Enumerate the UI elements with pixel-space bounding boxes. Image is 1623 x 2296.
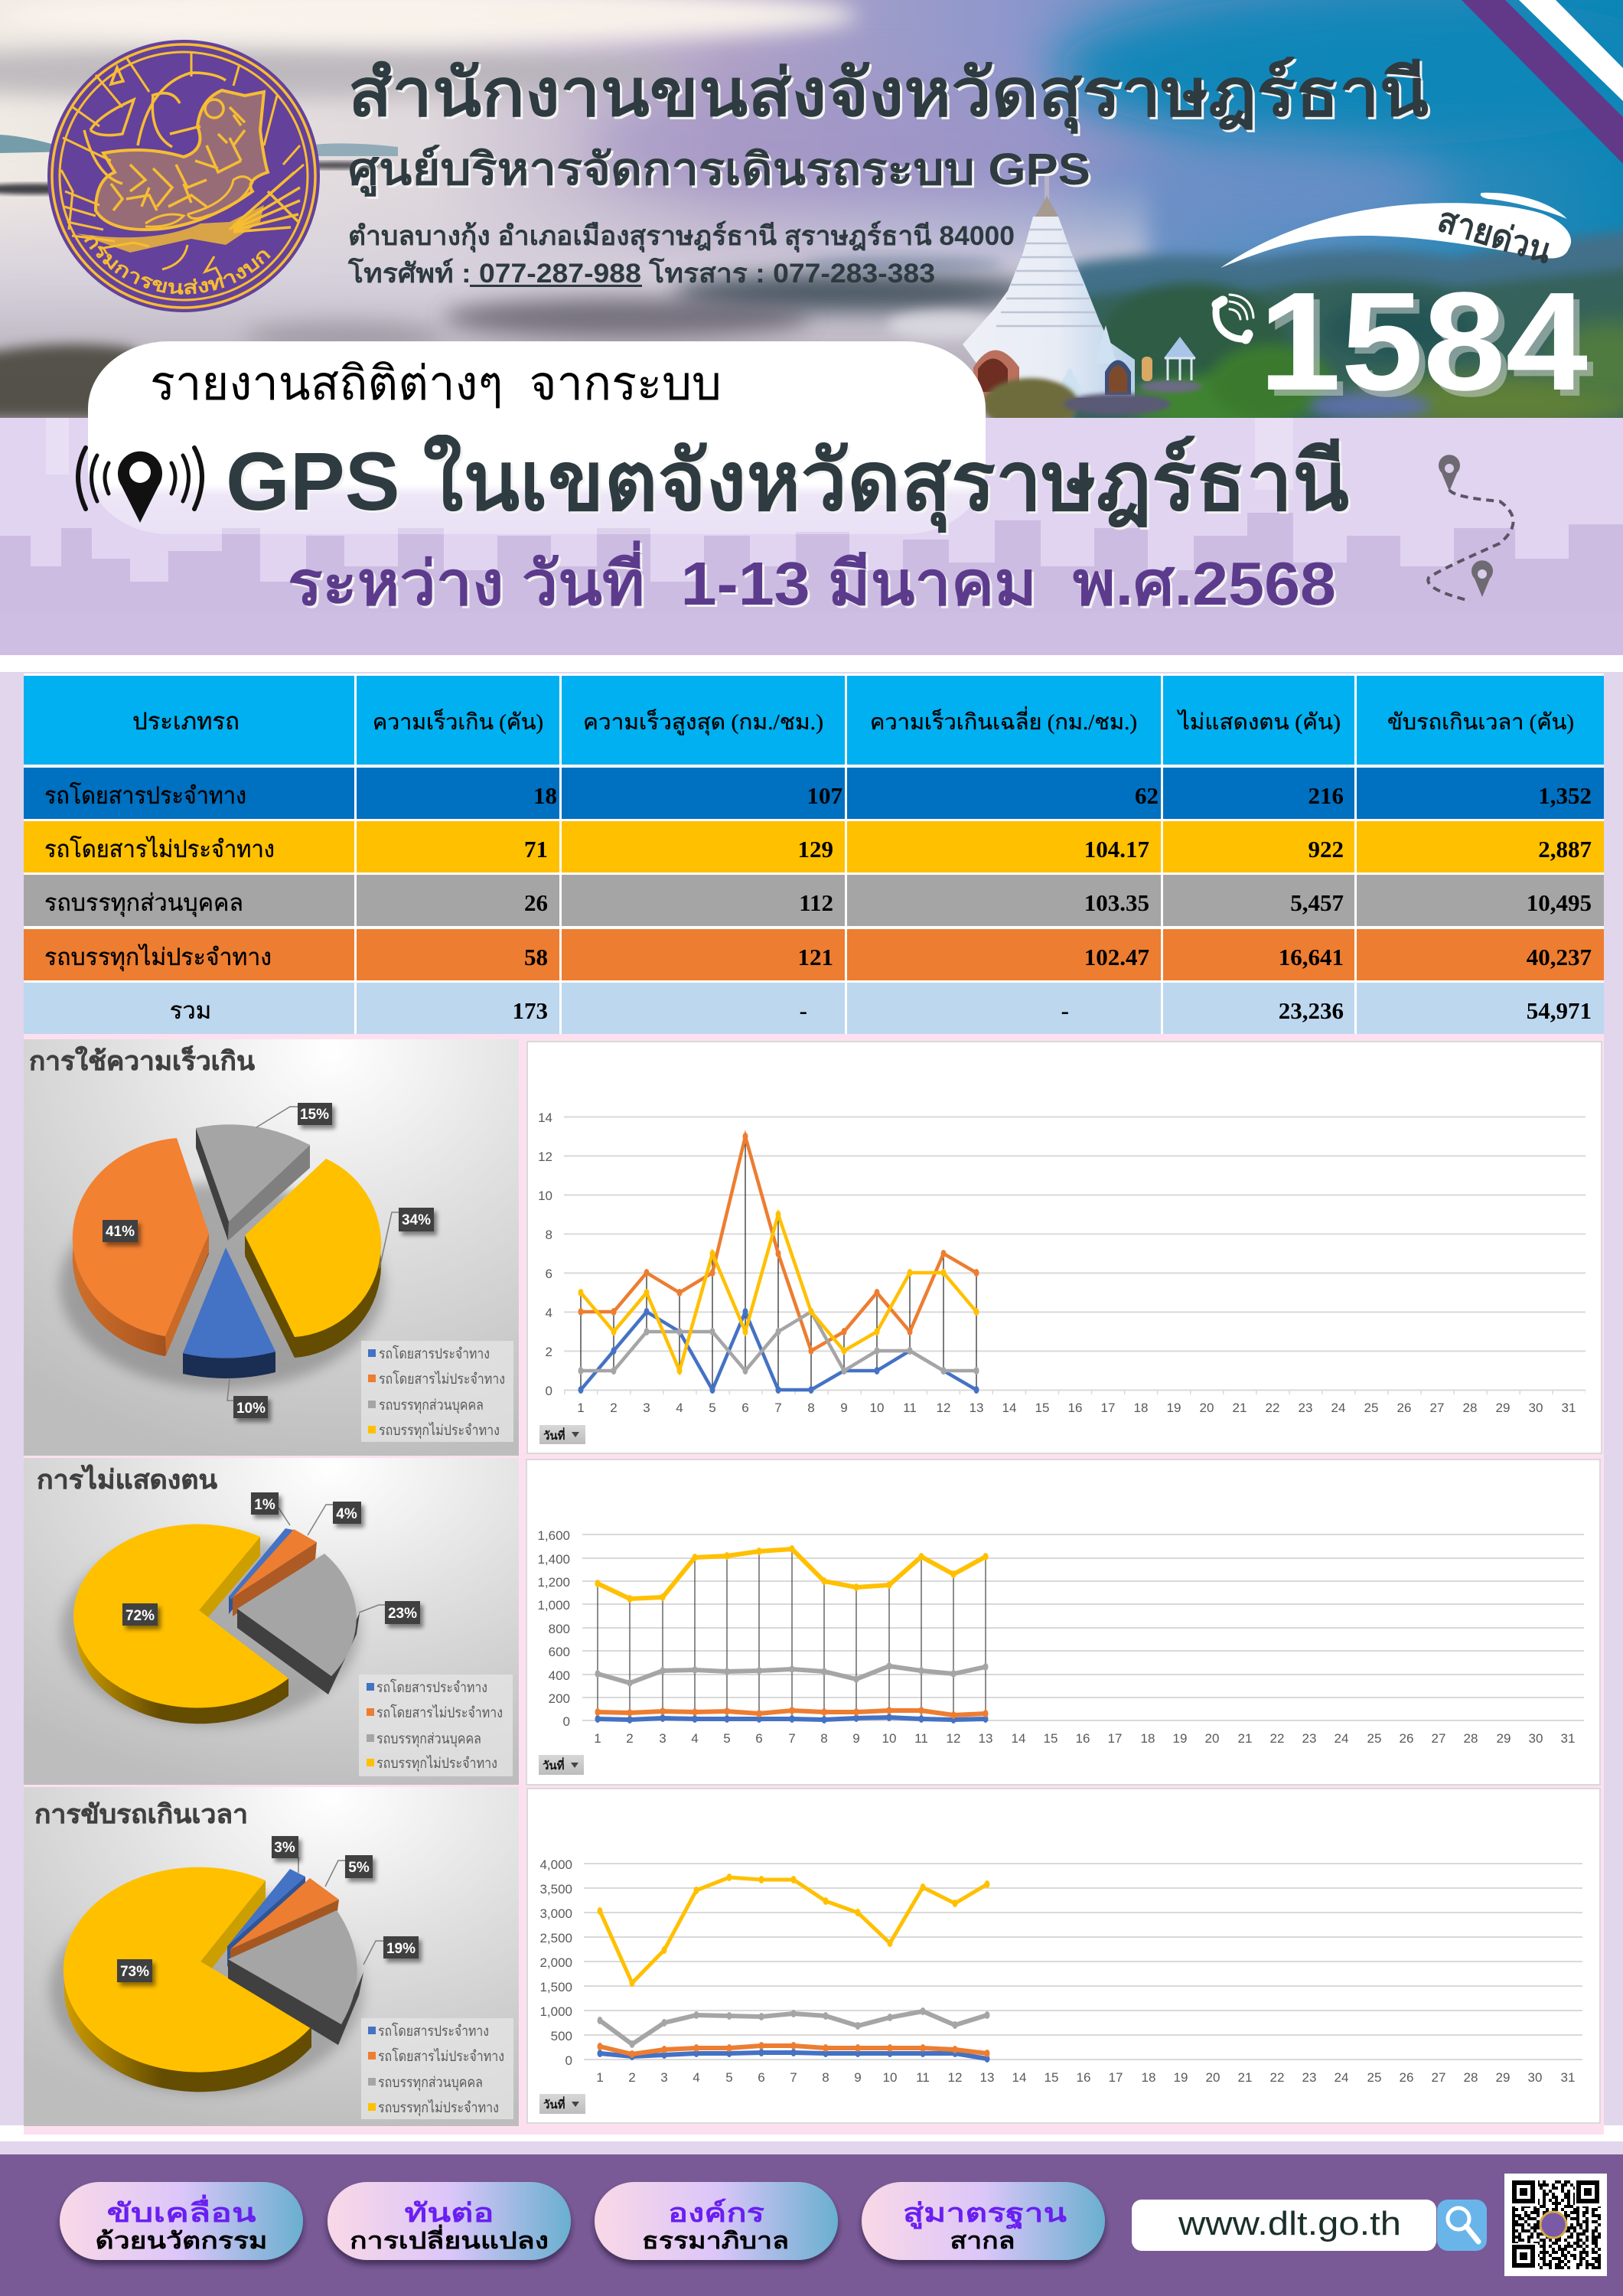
x axis labels: 1 [594, 1731, 601, 1746]
series: private truck [600, 2011, 987, 2044]
x axis labels: 21 [1233, 1401, 1247, 1415]
row: non-fixed-route truck: 58 [524, 944, 548, 970]
address: ตำบลบางกุ้ง อำเภอเมืองสุราษฎร์ธานี สุราษฎร์ธานี 84000 [348, 220, 1015, 253]
pie slice: fixed bus 3% [227, 1869, 305, 1967]
x axis labels: 22 [1270, 1731, 1284, 1746]
pie slice: non-fixed bus 4% [233, 1529, 317, 1616]
row: fixed-route bus: 1,352 [1538, 782, 1592, 809]
x axis labels [594, 1731, 1575, 1746]
x axis labels: 27 [1432, 1731, 1445, 1746]
legend: รถโดยสารประจำทาง [376, 1678, 487, 1696]
x axis labels: 19 [1173, 1731, 1187, 1746]
x axis labels: 26 [1400, 2070, 1413, 2085]
row: non-fixed-route truck: 121 [797, 944, 833, 970]
x axis labels: 17 [1101, 1401, 1115, 1415]
label 23%: 23% [388, 1606, 417, 1622]
x axis labels: 27 [1432, 2070, 1445, 2085]
series: non-fixed truck [598, 1549, 986, 1599]
header photo: misty mountains and white stupa [0, 0, 1623, 436]
row: fixed-route bus: 18 [533, 782, 557, 809]
x axis labels: 2 [610, 1401, 618, 1415]
row: non-fixed-route bus: รถโดยสารไม่ประจำทาง [44, 836, 275, 863]
filter button: day [539, 1425, 585, 1444]
x axis labels: 28 [1464, 2070, 1478, 2085]
x axis labels: 18 [1141, 1731, 1155, 1746]
x axis labels: 13 [979, 1731, 992, 1746]
legend: รถบรรทุกส่วนบุคคล [376, 1731, 481, 1748]
x axis labels: 11 [916, 2070, 930, 2085]
row: private truck [24, 875, 1604, 926]
panel: speeding line chart [527, 1042, 1602, 1453]
x axis labels: 27 [1430, 1401, 1444, 1415]
statistics table [24, 673, 1604, 1034]
label 15%: 15% [300, 1107, 329, 1123]
hotline swoosh [1221, 193, 1571, 271]
high-low lines [581, 1137, 976, 1390]
legend: รถโดยสารประจำทาง [378, 2022, 489, 2040]
pie slice: truck non-fixed 34% [245, 1159, 381, 1358]
hotline swoosh: สายด่วน [1433, 199, 1556, 271]
row: total: - [1061, 997, 1069, 1024]
row: private truck: 5,457 [1290, 889, 1344, 916]
pie slice: non-fixed bus 5% [230, 1878, 339, 1959]
filter button: day: วันที่ [543, 1757, 565, 1773]
label 19% [383, 1936, 419, 1958]
legend: รถโดยสารไม่ประจำทาง [379, 1370, 505, 1388]
y axis labels [539, 1857, 572, 2068]
row: non-fixed-route bus: 129 [797, 836, 833, 863]
row: private truck: 112 [799, 889, 833, 916]
row: fixed-route bus [24, 768, 1604, 819]
y axis labels: 14 [538, 1110, 552, 1125]
series: fixed bus [581, 1312, 976, 1390]
row: non-fixed-route bus [24, 821, 1604, 872]
y axis labels: 1,200 [537, 1575, 570, 1590]
centre subtitle: ศูนย์บริหารจัดการเดินรถระบบ GPS [348, 144, 1090, 197]
x axis labels: 3 [659, 1731, 666, 1746]
row: total: - [800, 997, 807, 1024]
x axis labels: 2 [626, 1731, 634, 1746]
x axis labels: 5 [725, 2070, 733, 2085]
x axis labels: 12 [947, 1731, 960, 1746]
x axis labels: 20 [1200, 1401, 1214, 1415]
legend: รถบรรทุกไม่ประจำทาง [378, 2099, 499, 2117]
x axis labels: 11 [914, 1731, 928, 1746]
lavender band with city skyline [0, 418, 1623, 655]
white pill behind report title [88, 341, 986, 534]
legend [361, 1341, 513, 1442]
x axis labels: 7 [774, 1401, 782, 1415]
y axis labels: 200 [549, 1691, 570, 1706]
x axis labels: 22 [1266, 1401, 1279, 1415]
table header row [24, 676, 1604, 765]
slogan button 2: ทันต่อ [404, 2199, 494, 2228]
panel: speeding pie chart [24, 1039, 519, 1456]
x axis labels: 24 [1335, 2070, 1348, 2085]
label 3%: 3% [274, 1840, 295, 1856]
main title: GPS ในเขตจังหวัดสุราษฎร์ธานี [226, 435, 1349, 533]
y axis labels: 600 [549, 1645, 570, 1659]
x axis labels: 16 [1076, 1731, 1090, 1746]
table header row: ความเร็วเกิน (คัน) [373, 708, 543, 735]
x axis labels: 15 [1035, 1401, 1049, 1415]
label 1% [251, 1492, 279, 1515]
row: non-fixed-route bus: 104.17 [1084, 836, 1149, 863]
label 10%: 10% [236, 1401, 266, 1417]
x axis labels: 7 [788, 1731, 796, 1746]
label 4% [333, 1502, 361, 1524]
series: fixed bus [598, 1717, 986, 1720]
series: private truck [581, 1312, 976, 1371]
label 23% [385, 1601, 420, 1624]
x axis labels: 28 [1464, 1731, 1478, 1746]
website search box [1132, 2200, 1487, 2251]
label 19%: 19% [386, 1941, 416, 1957]
slogan button 3: องค์กร [668, 2198, 765, 2228]
leader lines [279, 1505, 385, 1613]
icon: GPS pin with signal [78, 448, 202, 523]
x axis labels: 23 [1299, 1401, 1312, 1415]
x axis labels: 24 [1335, 1731, 1348, 1746]
x axis labels: 18 [1134, 1401, 1148, 1415]
x axis labels: 4 [676, 1401, 683, 1415]
label 4%: 4% [336, 1506, 357, 1522]
leader lines [227, 1107, 399, 1401]
row: fixed-route bus: รถโดยสารประจำทาง [44, 782, 246, 809]
x axis labels: 26 [1397, 1401, 1411, 1415]
x axis labels: 28 [1463, 1401, 1477, 1415]
row: non-fixed-route truck: รถบรรทุกไม่ประจำทาง [44, 944, 272, 972]
ribbon stripes top right [1462, 0, 1623, 164]
table header row: ประเภทรถ [132, 708, 240, 735]
row: private truck: รถบรรทุกส่วนบุคคล [44, 889, 243, 918]
pie slice: non-fixed truck 73% [64, 1867, 311, 2092]
legend [361, 2018, 513, 2119]
series: non-fixed bus [581, 1137, 976, 1351]
y axis labels [537, 1528, 570, 1729]
row: total: 23,236 [1279, 997, 1344, 1024]
slogan button 2: การเปลี่ยนแปลง [350, 2224, 549, 2254]
x axis labels: 30 [1529, 1401, 1543, 1415]
legend: รถโดยสารประจำทาง [379, 1345, 490, 1362]
filter button: day [539, 1755, 584, 1775]
y axis labels: 4 [546, 1306, 552, 1320]
y axis labels: 800 [549, 1622, 570, 1636]
table header row: ขับรถเกินเวลา (คัน) [1387, 710, 1574, 735]
row: non-fixed-route bus: 2,887 [1538, 836, 1592, 863]
x axis labels: 29 [1496, 2070, 1510, 2085]
x axis labels: 13 [980, 2070, 994, 2085]
row: private truck: 26 [524, 889, 548, 916]
x axis labels: 30 [1529, 1731, 1543, 1746]
y axis labels: 0 [563, 1714, 570, 1729]
x axis labels: 14 [1002, 1401, 1016, 1415]
x axis labels: 3 [643, 1401, 650, 1415]
x axis labels: 5 [709, 1401, 716, 1415]
row: non-fixed-route truck: 16,641 [1279, 944, 1344, 970]
x axis labels [596, 2070, 1575, 2085]
report heading: รายงานสถิติต่างๆ จากระบบ [150, 357, 722, 410]
y axis labels: 4,000 [539, 1857, 572, 1872]
heading: overtime driving: การขับรถเกินเวลา [34, 1800, 248, 1829]
slogan button 2 [328, 2182, 571, 2260]
row: non-fixed-route truck: 102.47 [1084, 944, 1149, 970]
high-low lines [598, 1549, 986, 1720]
x axis labels: 3 [660, 2070, 668, 2085]
x axis labels [577, 1401, 1576, 1415]
x axis labels: 12 [937, 1401, 950, 1415]
x axis labels: 25 [1364, 1401, 1378, 1415]
x axis labels: 1 [577, 1401, 585, 1415]
pie slice: private truck 15% [196, 1124, 310, 1241]
legend: รถโดยสารไม่ประจำทาง [378, 2047, 504, 2065]
pie slice: private truck 23% [237, 1554, 360, 1694]
row: fixed-route bus: 62 [1135, 782, 1159, 809]
pie slice: non-fixed truck 72% [73, 1525, 288, 1724]
row: fixed-route bus: 216 [1309, 782, 1344, 809]
x axis labels: 31 [1561, 1731, 1575, 1746]
row: total [24, 983, 1604, 1034]
x axis labels: 15 [1044, 1731, 1058, 1746]
x axis labels: 9 [854, 2070, 862, 2085]
row: total: 54,971 [1527, 997, 1592, 1024]
x axis labels: 26 [1400, 1731, 1413, 1746]
department seal [47, 40, 320, 312]
x axis labels: 7 [790, 2070, 797, 2085]
table header row: ความเร็วสูงสุด (กม./ชม.) [583, 708, 823, 735]
x axis labels: 6 [741, 1401, 749, 1415]
label 34% [399, 1208, 434, 1231]
x axis labels: 12 [948, 2070, 962, 2085]
icon: phone [1216, 295, 1253, 339]
x axis labels: 10 [883, 2070, 897, 2085]
x axis labels: 29 [1496, 1401, 1510, 1415]
y axis labels: 3,000 [539, 1906, 572, 1921]
legend: รถบรรทุกส่วนบุคคล [378, 2075, 483, 2092]
label 72%: 72% [125, 1608, 155, 1624]
label 41% [103, 1220, 138, 1242]
x axis labels: 9 [852, 1731, 860, 1746]
x axis labels: 10 [882, 1731, 896, 1746]
series: non-fixed truck [600, 1877, 987, 1983]
label 73% [117, 1959, 152, 1982]
website search box: www.dlt.go.th [1178, 2205, 1401, 2242]
series: fixed bus [600, 2053, 987, 2059]
pie slice: fixed bus 1% [229, 1528, 293, 1614]
department seal: กรมการขนส่งทางบก [84, 235, 271, 295]
footer bar [0, 2154, 1623, 2296]
x axis labels: 21 [1238, 2070, 1252, 2085]
x axis labels: 17 [1108, 1731, 1122, 1746]
x axis labels: 29 [1497, 1731, 1511, 1746]
x axis labels: 20 [1206, 2070, 1220, 2085]
x axis labels: 17 [1109, 2070, 1123, 2085]
heading: no identification: การไม่แสดงตน [37, 1464, 217, 1495]
y axis labels: 1,000 [539, 2004, 572, 2019]
label 5%: 5% [348, 1860, 370, 1876]
y axis labels: 3,500 [539, 1882, 572, 1896]
legend: รถบรรทุกไม่ประจำทาง [379, 1422, 500, 1440]
x axis labels: 19 [1174, 2070, 1188, 2085]
series: non-fixed truck [581, 1215, 976, 1371]
legend: รถบรรทุกส่วนบุคคล [379, 1397, 484, 1414]
legend: รถโดยสารไม่ประจำทาง [376, 1704, 503, 1721]
x axis labels: 23 [1302, 1731, 1316, 1746]
table header row: ความเร็วเกินเฉลี่ย (กม./ชม.) [870, 706, 1137, 735]
x axis labels: 22 [1270, 2070, 1284, 2085]
y axis labels: 6 [546, 1267, 552, 1281]
series: non-fixed bus [600, 2046, 987, 2054]
y axis labels: 2,500 [539, 1931, 572, 1945]
slogan button 4: สากล [950, 2229, 1015, 2254]
x axis labels: 6 [758, 2070, 765, 2085]
series: non-fixed bus [598, 1711, 986, 1715]
pie slice: private truck 19% [228, 1910, 363, 2045]
x axis labels: 14 [1012, 1731, 1025, 1746]
slogan button 4: สู่มาตรฐาน [903, 2199, 1067, 2230]
label 5% [345, 1855, 373, 1878]
row: non-fixed-route truck: 40,237 [1527, 944, 1592, 970]
slogan button 4 [862, 2182, 1105, 2260]
x axis labels: 14 [1012, 2070, 1026, 2085]
organisation title: สำนักงานขนส่งจังหวัดสุราษฎร์ธานี [348, 57, 1429, 134]
panel: overtime driving pie chart [24, 1787, 519, 2126]
x axis labels: 6 [755, 1731, 763, 1746]
label 1%: 1% [254, 1497, 275, 1513]
label 73%: 73% [120, 1964, 149, 1980]
panel: no-identification pie chart [24, 1458, 519, 1785]
y axis labels: 8 [546, 1228, 552, 1242]
x axis labels: 8 [822, 2070, 829, 2085]
x axis labels: 31 [1562, 1401, 1576, 1415]
y axis labels: 1,400 [537, 1552, 570, 1567]
icon: gazebo [1164, 337, 1196, 380]
panel: overtime driving line chart [527, 1789, 1600, 2123]
x axis labels: 30 [1528, 2070, 1542, 2085]
x axis labels: 25 [1367, 2070, 1381, 2085]
x axis labels: 19 [1167, 1401, 1181, 1415]
legend [359, 1675, 513, 1776]
panel: no-identification line chart [526, 1459, 1600, 1785]
heading: speeding: การใช้ความเร็วเกิน [29, 1045, 255, 1076]
series: private truck [598, 1666, 986, 1683]
label 72% [122, 1603, 158, 1626]
x axis labels: 16 [1068, 1401, 1082, 1415]
x axis labels: 15 [1045, 2070, 1058, 2085]
label 3% [272, 1836, 298, 1858]
slogan button 3: ธรรมาภิบาล [642, 2229, 789, 2254]
row: non-fixed-route bus: 922 [1309, 836, 1344, 863]
legend: รถบรรทุกไม่ประจำทาง [376, 1755, 497, 1773]
x axis labels: 16 [1077, 2070, 1090, 2085]
x axis labels: 13 [970, 1401, 983, 1415]
y axis labels [538, 1110, 552, 1398]
x axis labels: 23 [1302, 2070, 1316, 2085]
icon: stupa [963, 176, 1201, 430]
x axis labels: 24 [1331, 1401, 1345, 1415]
y axis labels: 10 [538, 1189, 552, 1203]
y axis labels: 400 [549, 1668, 570, 1683]
row: non-fixed-route bus: 71 [524, 836, 548, 863]
table header row: ไม่แสดงตน (คัน) [1177, 709, 1341, 735]
slogan button 1 [60, 2182, 303, 2260]
x axis labels: 5 [723, 1731, 731, 1746]
x axis labels: 20 [1205, 1731, 1219, 1746]
row: private truck: 10,495 [1527, 889, 1592, 916]
x axis labels: 25 [1367, 1731, 1381, 1746]
y axis labels: 2 [546, 1345, 552, 1359]
icon: route map with pins [1428, 455, 1514, 601]
y axis labels: 2,000 [539, 1955, 572, 1970]
label 41%: 41% [106, 1224, 135, 1240]
x axis labels: 31 [1561, 2070, 1575, 2085]
label 34%: 34% [402, 1212, 431, 1228]
x axis labels: 1 [596, 2070, 604, 2085]
y axis labels: 12 [538, 1150, 552, 1164]
x axis labels: 4 [693, 2070, 700, 2085]
x axis labels: 10 [870, 1401, 884, 1415]
filter button: day: วันที่ [543, 2096, 565, 2112]
x axis labels: 9 [840, 1401, 848, 1415]
filter button: day [539, 2094, 585, 2114]
pie slice: non-fixed bus 41% [73, 1138, 209, 1356]
x axis labels: 8 [820, 1731, 828, 1746]
phone and fax: โทรศัพท์ : 077-287-988 โทรสาร : 077-283-383 [347, 257, 935, 289]
x axis labels: 8 [807, 1401, 815, 1415]
row: fixed-route bus: 107 [807, 782, 842, 809]
row: total: รวม [170, 997, 211, 1024]
x axis labels: 4 [691, 1731, 699, 1746]
filter button: day: วันที่ [543, 1427, 565, 1443]
y axis labels: 1,500 [539, 1980, 572, 1994]
label 15% [298, 1103, 332, 1125]
far hills behind stupa [1071, 230, 1623, 429]
x axis labels: 18 [1142, 2070, 1155, 2085]
y axis labels: 500 [551, 2029, 572, 2043]
x axis labels: 2 [628, 2070, 636, 2085]
icon: magnifier [1448, 2208, 1478, 2242]
y axis labels: 0 [565, 2053, 572, 2068]
slogan button 1: ด้วยนวัตกรรม [95, 2229, 268, 2254]
pie slice: fixed bus 10% [183, 1247, 275, 1378]
x axis labels: 21 [1238, 1731, 1252, 1746]
slogan button 3 [595, 2182, 838, 2260]
leader lines [298, 1857, 383, 1965]
row: non-fixed-route truck [24, 929, 1604, 980]
y axis labels: 1,000 [537, 1598, 570, 1613]
row: private truck: 103.35 [1084, 889, 1149, 916]
y axis labels: 0 [546, 1384, 552, 1398]
x axis labels: 11 [903, 1401, 917, 1415]
hotline number: 1584 [1259, 263, 1588, 419]
slogan button 1: ขับเคลื่อน [107, 2194, 256, 2228]
label 10% [233, 1396, 268, 1418]
date range: ระหว่าง วันที่ 1-13 มีนาคม พ.ศ.2568 [288, 540, 1336, 618]
QR code [1504, 2174, 1607, 2276]
row: total: 173 [513, 997, 548, 1024]
y axis labels: 1,600 [537, 1528, 570, 1543]
